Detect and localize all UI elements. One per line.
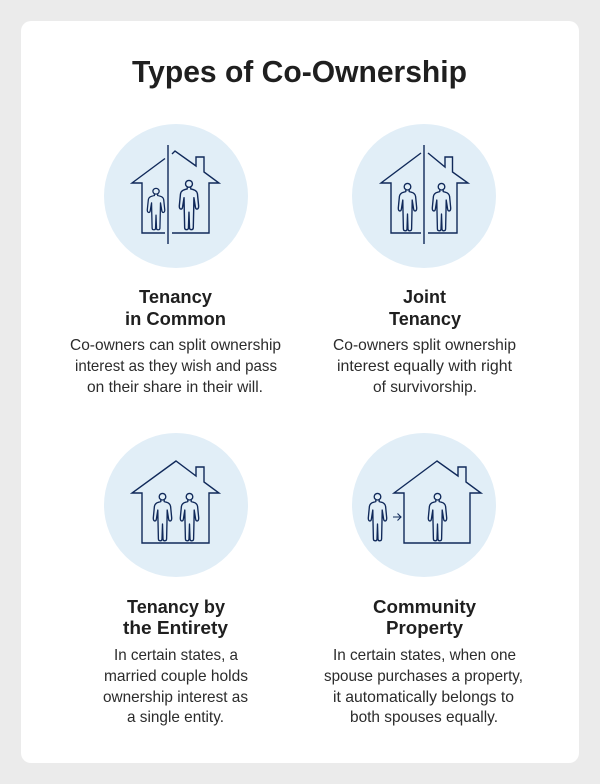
description: In certain states, when one bbox=[333, 647, 516, 664]
description: In certain states, a bbox=[114, 647, 238, 664]
description: a single entity. bbox=[127, 709, 224, 726]
description bbox=[324, 647, 523, 726]
panel: community property bbox=[324, 433, 523, 726]
heading bbox=[373, 596, 477, 638]
heading: Tenancy bbox=[389, 308, 462, 329]
panel: joint tenancy bbox=[333, 124, 516, 396]
heading: Tenancy by bbox=[127, 596, 226, 617]
panel: tenancy by the entirety bbox=[103, 433, 248, 726]
description: Co-owners can split ownership bbox=[70, 337, 281, 354]
description: both spouses equally. bbox=[350, 709, 498, 726]
heading: the Entirety bbox=[123, 617, 229, 638]
icon: house with two people bbox=[104, 433, 248, 577]
heading: in Common bbox=[125, 308, 226, 329]
icon: person entering house bbox=[352, 433, 496, 577]
description: of survivorship. bbox=[373, 379, 477, 396]
arrow bbox=[393, 514, 401, 520]
title: Types of Co-Ownership bbox=[132, 54, 467, 89]
heading: Tenancy bbox=[139, 286, 213, 307]
heading bbox=[123, 596, 229, 638]
heading: Community bbox=[373, 596, 477, 617]
icon: split house with unequal people bbox=[104, 124, 248, 268]
icon: split house with equal people bbox=[352, 124, 496, 268]
heading: Joint bbox=[403, 286, 446, 307]
heading: Property bbox=[386, 617, 464, 638]
description: spouse purchases a property, bbox=[324, 668, 523, 685]
heading bbox=[125, 286, 226, 329]
description: on their share in their will. bbox=[87, 379, 263, 396]
description: it automatically belongs to bbox=[333, 689, 514, 706]
panel: tenancy in common bbox=[70, 124, 281, 396]
description: Co-owners split ownership bbox=[333, 337, 516, 354]
description: ownership interest as bbox=[103, 689, 248, 706]
description bbox=[70, 337, 281, 396]
description: interest as they wish and pass bbox=[75, 358, 277, 375]
heading bbox=[389, 286, 462, 329]
description: interest equally with right bbox=[337, 358, 513, 375]
description bbox=[103, 647, 248, 726]
description: married couple holds bbox=[104, 668, 248, 685]
description bbox=[333, 337, 516, 396]
